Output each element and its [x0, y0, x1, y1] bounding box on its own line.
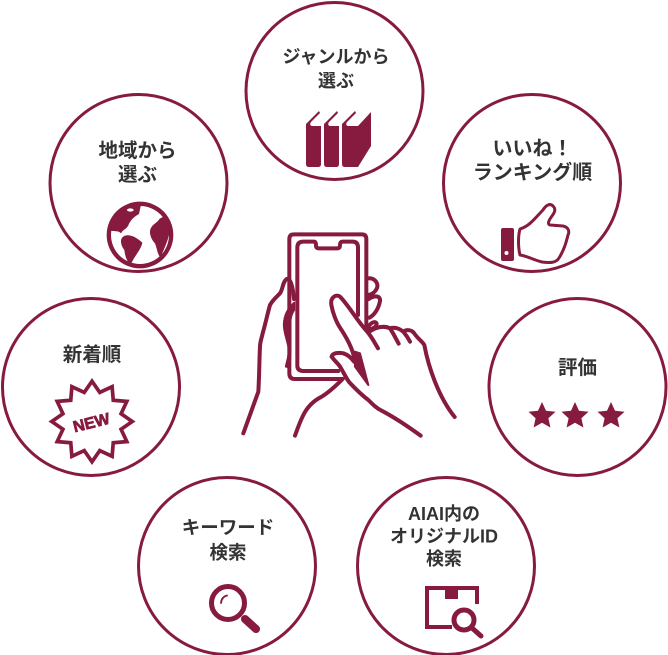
panel: genre	[246, 2, 423, 180]
heading: ranking: いいね！	[492, 138, 572, 160]
heading: keyword: 検索	[209, 542, 247, 563]
icon: box search	[427, 588, 481, 636]
heading: AIAI ID: 検索	[426, 549, 462, 569]
panel: keyword	[138, 478, 316, 654]
panel: newest	[2, 298, 180, 476]
icon: magnifier	[212, 586, 256, 629]
left palm shadow	[284, 302, 294, 368]
left hand	[243, 279, 294, 433]
illustration: hands holding smartphone	[243, 234, 455, 436]
right hand	[295, 379, 343, 436]
heading: AIAI ID: オリジナルID	[390, 526, 498, 546]
heading: newest: 新着順	[63, 344, 122, 366]
phone body	[289, 234, 366, 379]
heading: genre: 選ぶ	[318, 71, 354, 91]
back fingers	[368, 278, 377, 295]
heading: keyword: キーワード	[182, 517, 274, 538]
heading: genre: ジャンルから	[282, 47, 390, 67]
heading: region: 選ぶ	[118, 164, 157, 186]
icon: thumbs up	[501, 205, 569, 263]
phone screen	[297, 242, 358, 371]
icon: books	[306, 111, 371, 167]
heading: rating: 評価	[558, 357, 597, 379]
icon: new badge	[52, 381, 132, 462]
icon: three stars	[528, 402, 624, 428]
panel: AIAI ID	[358, 478, 534, 654]
panel: rating	[489, 298, 666, 476]
heading: region: 地域から	[98, 140, 177, 162]
panel: region	[50, 94, 227, 272]
heading: ranking: ランキング順	[473, 160, 592, 184]
badge label: NEW	[71, 411, 113, 436]
heading: AIAI ID: AIAI内の	[408, 504, 480, 524]
icon: globe	[107, 202, 173, 268]
panel: ranking	[444, 94, 620, 272]
